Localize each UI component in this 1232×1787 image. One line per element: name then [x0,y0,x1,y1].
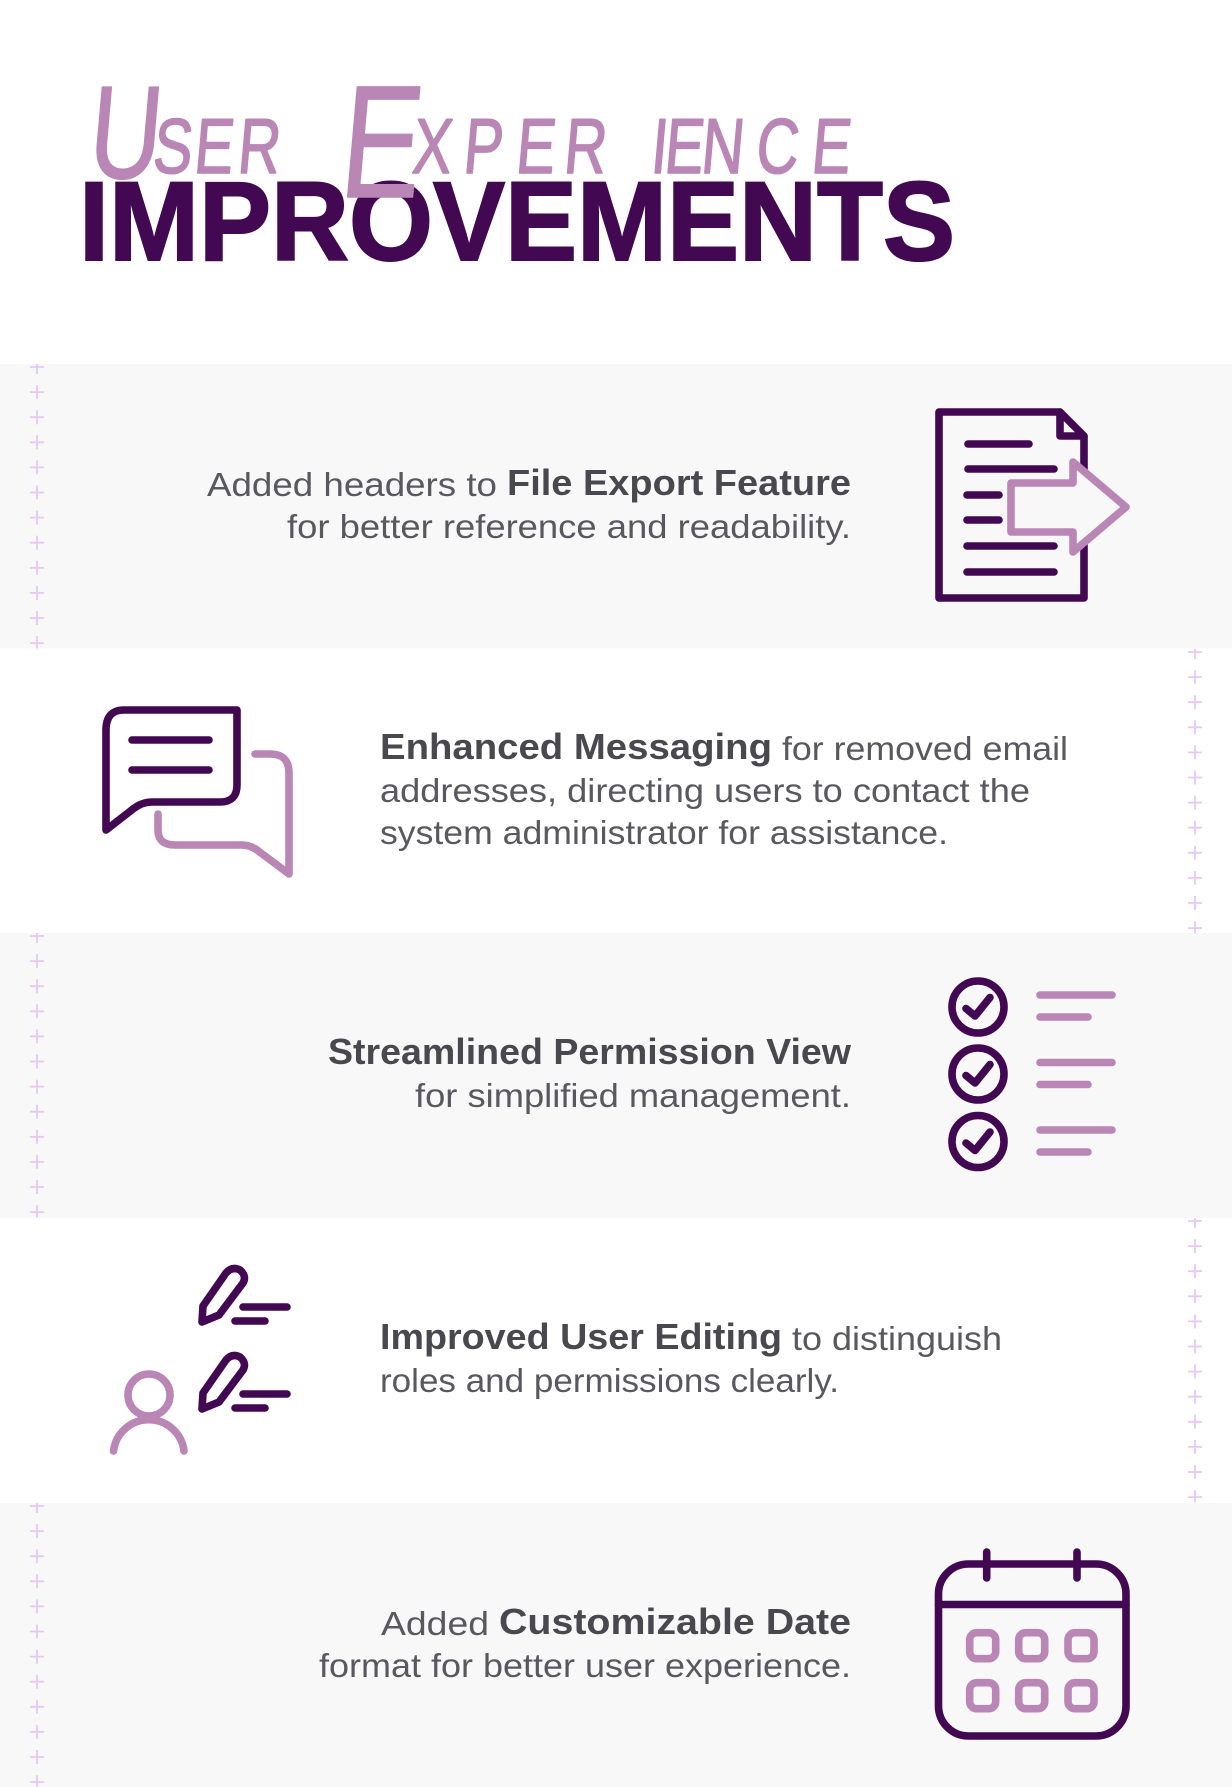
text: messaging [380,726,1068,851]
text: permission view [328,1031,852,1114]
text: file export: File Export Feature [507,462,851,503]
heading: user experience: U [84,58,169,206]
text: file export: Added headers to [207,466,497,503]
icon: document with arrow [939,412,1126,598]
panel: file export [207,412,1126,598]
text: messaging: system administrator for assistance. [380,814,948,851]
text: messaging: addresses, directing users to contact the [380,772,1030,809]
text: user editing [380,1316,1002,1399]
text: file export [207,462,851,545]
text: customizable date: Added [381,1605,489,1642]
panel: permission view [328,981,1112,1168]
text: user editing: to distinguish [792,1320,1002,1357]
text: customizable date: format for better user experience. [319,1647,851,1684]
text: permission view: for simplified management. [415,1077,851,1114]
heading: user experience: SER [0,102,285,190]
text: messaging: for removed email [782,730,1068,767]
icon: checklist [952,981,1112,1168]
icon: user with pencils [114,1269,287,1451]
heading: improvements: IMPROVEMENTS [79,159,955,284]
text: user editing: Improved User Editing [380,1316,782,1357]
icon: chat bubbles [106,710,289,874]
text: customizable date: Customizable Date [499,1601,851,1642]
panel: messaging [106,710,1068,874]
heading: user experience: XPERIENCE [410,102,855,190]
panel: customizable date [319,1552,1126,1736]
heading: user experience: E [335,54,430,232]
text: messaging: Enhanced Messaging [380,726,772,767]
icon: calendar [938,1552,1126,1736]
panel: user editing [114,1269,1002,1451]
text: customizable date [319,1601,851,1684]
text: file export: for better reference and readability. [287,508,851,545]
text: user editing: roles and permissions clearly. [380,1362,839,1399]
text: permission view: Streamlined Permission View [328,1031,852,1072]
